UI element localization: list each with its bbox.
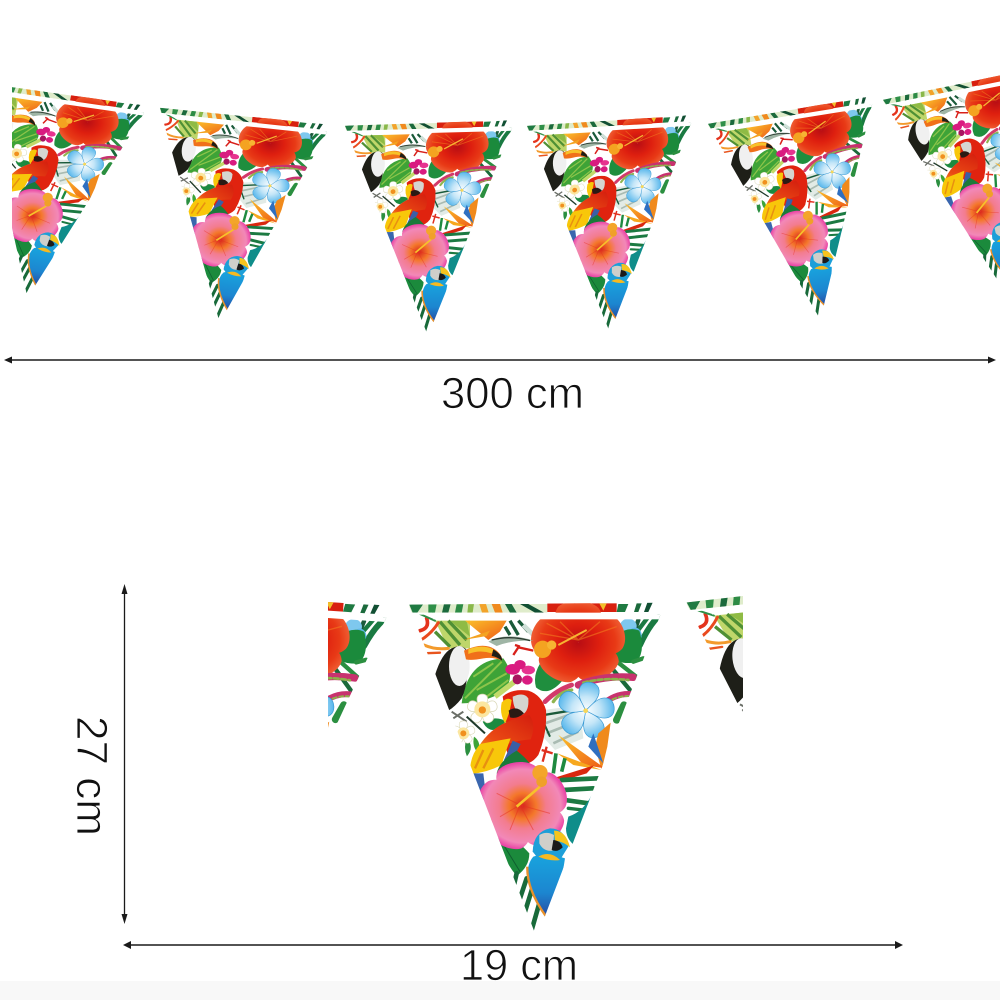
banner flag 4 bbox=[526, 114, 693, 335]
label: 300 cm: 300 cm bbox=[441, 370, 584, 418]
label: 19 cm: 19 cm bbox=[460, 942, 578, 990]
green foliage behind frangipani bbox=[465, 718, 507, 757]
pink orchid bbox=[505, 660, 535, 685]
blue flower bbox=[551, 677, 621, 745]
arrow: flag height bbox=[122, 584, 128, 924]
banner flag 6 (cropped right) bbox=[882, 65, 1000, 306]
white frangipani small bbox=[451, 721, 476, 745]
label: 27 cm: 27 cm bbox=[67, 716, 115, 836]
fronds under right leaf bbox=[613, 658, 643, 720]
toucan bbox=[435, 646, 502, 722]
leaf: below red hibiscus bbox=[535, 656, 564, 691]
dark fronds top centre bbox=[505, 621, 533, 635]
top hem stripes bbox=[409, 603, 653, 613]
arrow: flag width bbox=[123, 941, 903, 949]
heliconia right bbox=[545, 677, 633, 705]
grey-white leaf bbox=[543, 705, 583, 750]
pennant banner: large centre flag bbox=[408, 601, 663, 933]
small blue petal right bbox=[628, 628, 642, 642]
white frangipani large bbox=[466, 694, 498, 725]
red twig bbox=[513, 645, 533, 655]
red heliconia left bbox=[420, 614, 448, 653]
flag: left side cut-off pennant in lower view bbox=[328, 602, 386, 728]
banner flag 5 bbox=[707, 95, 902, 330]
arrow: banner length bbox=[4, 356, 996, 364]
red hibiscus bbox=[526, 601, 631, 688]
banner flag 3 bbox=[342, 119, 514, 335]
bird of paradise lower bbox=[553, 723, 611, 779]
small blue flower behind hibiscus bbox=[620, 619, 637, 633]
leaf: right of red hibiscus bbox=[607, 629, 642, 663]
lower fronds bbox=[514, 873, 539, 930]
banner flag 2 bbox=[134, 105, 330, 329]
orange stamen cluster bbox=[534, 640, 556, 658]
flag base bbox=[409, 603, 660, 933]
big green leaf bottom bbox=[497, 837, 529, 876]
bird of paradise top bbox=[463, 621, 533, 646]
banner flag 1 (cropped left) bbox=[0, 80, 148, 307]
stems right of macaw bbox=[553, 753, 565, 773]
fronds below bird of paradise bbox=[562, 778, 598, 810]
white hem band bbox=[408, 613, 663, 619]
footer grey band bbox=[0, 981, 1000, 1000]
scarlet macaw bbox=[470, 690, 546, 774]
blue macaw bbox=[527, 828, 570, 918]
red twig by macaw bbox=[542, 747, 553, 762]
teal leaf bbox=[566, 795, 592, 845]
pink hibiscus bbox=[466, 755, 580, 861]
flag: right side cut-off pennant in lower view bbox=[685, 572, 974, 929]
palm leaf behind toucan bbox=[462, 658, 517, 703]
blue tail behind pink hibiscus bbox=[472, 773, 487, 802]
far right fronds bbox=[635, 617, 658, 645]
green leaf under macaw bbox=[497, 751, 531, 778]
side stems bbox=[467, 717, 485, 733]
fan leaves top left bbox=[435, 621, 470, 648]
